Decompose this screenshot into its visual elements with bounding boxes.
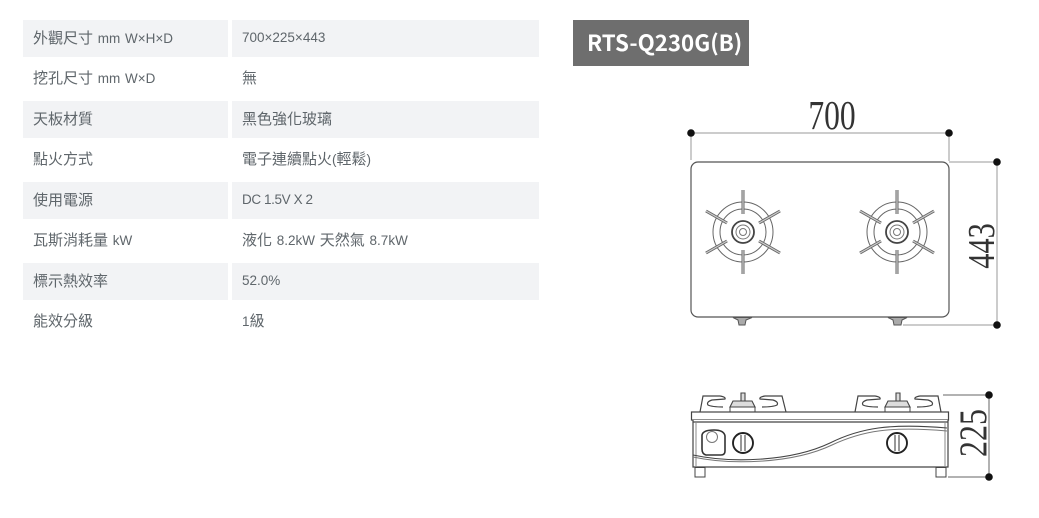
row label: top plate material: [23, 101, 228, 138]
top plate edge: [692, 412, 948, 420]
front view drawing: [692, 391, 995, 481]
model name banner: RTS-Q230G(B): [587, 26, 742, 58]
right underside bracket: [888, 318, 907, 325]
right control knob: [887, 433, 907, 453]
row label: top plate material: 天板材質: [33, 108, 93, 129]
left foot: [695, 468, 705, 477]
row label: cutout dimensions: 挖孔尺寸 mm W×D: [33, 67, 155, 88]
left burner: [706, 190, 780, 274]
row label: power source: 使用電源: [33, 189, 93, 210]
row value: power source: DC 1.5V X 2: [242, 192, 313, 207]
curved front panel line: [693, 426, 947, 460]
spec table: [23, 20, 539, 331]
left control knob: [733, 433, 753, 453]
right foot: [936, 468, 946, 477]
depth dimension line: [903, 158, 1001, 329]
height dimension line: [943, 391, 993, 481]
model name banner: [573, 20, 749, 66]
row value: energy grade: 1級: [242, 310, 265, 331]
row label: power source: [23, 182, 228, 219]
right burner head: [885, 393, 910, 407]
row value: thermal efficiency: 52.0%: [242, 273, 280, 288]
glass top plate: [691, 162, 949, 317]
row label: energy grade: 能效分級: [33, 310, 93, 331]
row value: thermal efficiency: [232, 263, 539, 300]
right pan support: [855, 396, 941, 412]
left pan support: [700, 396, 786, 412]
row label: thermal efficiency: 標示熱效率: [33, 270, 108, 291]
right burner: [860, 190, 934, 274]
row value: cutout dimensions: 無: [242, 67, 257, 88]
row label: gas consumption: 瓦斯消耗量 kW: [33, 229, 132, 250]
height label 225: 225: [951, 409, 995, 457]
row value: top plate material: 黑色強化玻璃: [242, 108, 332, 129]
row value: ignition method: 電子連續點火(輕鬆): [242, 148, 371, 169]
top view drawing: [687, 92, 1003, 329]
depth label 443: 443: [961, 223, 1003, 269]
row label: outer dimensions: 外觀尺寸 mm W×H×D: [33, 27, 173, 48]
left burner head: [730, 393, 755, 407]
row label: ignition method: 點火方式: [33, 148, 93, 169]
row value: top plate material: [232, 101, 539, 138]
width label 700: 700: [808, 92, 856, 138]
ignition battery box: [702, 430, 725, 455]
row value: power source: [232, 182, 539, 219]
row label: thermal efficiency: [23, 263, 228, 300]
row value: outer dimensions: 700×225×443: [242, 30, 325, 45]
left underside bracket: [733, 318, 752, 325]
row label: outer dimensions: [23, 20, 228, 57]
row value: outer dimensions: [232, 20, 539, 57]
body: [693, 420, 948, 467]
row value: gas consumption: 液化 8.2kW 天然氣 8.7kW: [242, 229, 408, 250]
width dimension line: [687, 129, 953, 161]
